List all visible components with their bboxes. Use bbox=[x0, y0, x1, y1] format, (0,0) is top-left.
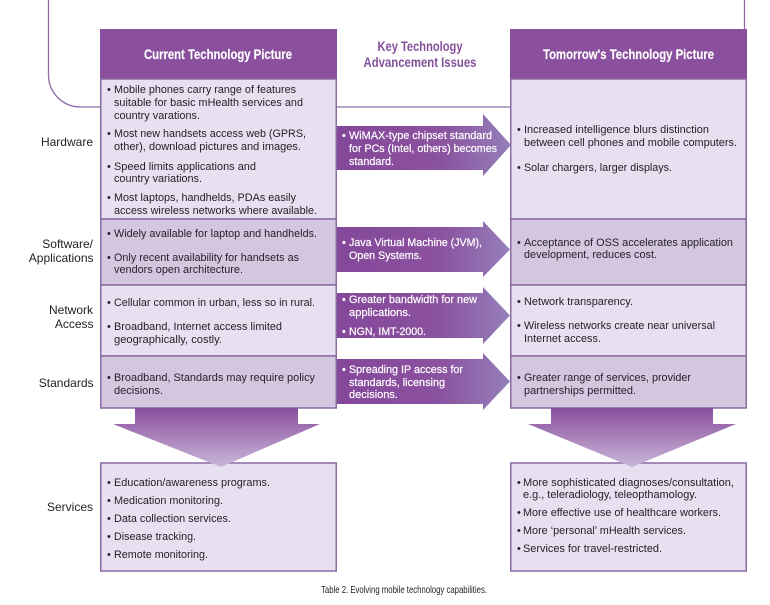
arrow: hardware advancement: for PCs (Intel, others) becomes bbox=[349, 143, 497, 155]
panel: tomorrow services: Services for travel-restricted. bbox=[523, 543, 662, 555]
panel: tomorrow services: • bbox=[517, 477, 521, 489]
row: current hardware: • bbox=[107, 84, 111, 96]
row: current software: Widely available for laptop and handhelds. bbox=[114, 228, 317, 240]
label: services: Services bbox=[47, 500, 93, 514]
arrow: software advancement bbox=[337, 221, 510, 277]
header: current technology: Current Technology Picture bbox=[144, 46, 292, 62]
row: tomorrow software: development, reduces cost. bbox=[524, 249, 657, 261]
label: software/applications: Software/ bbox=[42, 237, 94, 251]
panel: current services: Education/awareness programs. bbox=[114, 477, 270, 489]
panel: current technology picture bbox=[100, 29, 337, 408]
header: tomorrow's technology: Tomorrow's Technology Picture bbox=[543, 46, 714, 62]
row: current software: vendors open architecture. bbox=[114, 264, 243, 276]
row: tomorrow hardware: • bbox=[517, 124, 521, 136]
panel: current services: Data collection services. bbox=[114, 513, 231, 525]
row: current software: • bbox=[107, 252, 111, 264]
row: current software bbox=[101, 219, 336, 285]
arrow: network advancement bbox=[337, 287, 510, 344]
row: current hardware: country varations. bbox=[114, 110, 200, 122]
arrow: standards advancement: Spreading IP access for bbox=[349, 364, 463, 376]
row: current hardware: • bbox=[107, 128, 111, 140]
connector line: outer frame bbox=[48, 0, 744, 107]
panel: current services: Remote monitoring. bbox=[114, 549, 208, 561]
arrow: standards advancement: decisions. bbox=[349, 389, 398, 401]
label: network access: Access bbox=[55, 317, 94, 331]
panel: current services: • bbox=[107, 495, 111, 507]
label: software/applications: Applications bbox=[29, 251, 94, 265]
row: current hardware: Mobile phones carry range of features bbox=[114, 84, 296, 96]
row: current hardware: • bbox=[107, 161, 111, 173]
label: network access: Network bbox=[49, 303, 94, 317]
row: current hardware: Most laptops, handhelds, PDAs easily bbox=[114, 192, 296, 204]
arrow: network advancement: NGN, IMT-2000. bbox=[349, 326, 426, 338]
row: current standards bbox=[101, 356, 336, 408]
row: tomorrow standards: partnerships permitted. bbox=[524, 385, 636, 397]
arrow: hardware advancement: standard. bbox=[349, 156, 394, 168]
panel: current services: • bbox=[107, 513, 111, 525]
row: tomorrow network access: • bbox=[517, 296, 521, 308]
row: current network access: Cellular common in urban, less so in rural. bbox=[114, 297, 315, 309]
arrow: hardware advancement: WiMAX-type chipset standard bbox=[349, 130, 492, 142]
row: tomorrow network access bbox=[511, 285, 746, 356]
arrow: network advancement: Greater bandwidth for new bbox=[349, 294, 477, 306]
panel: tomorrow services bbox=[511, 463, 746, 571]
row: current network access: • bbox=[107, 321, 111, 333]
row: current hardware: suitable for basic mHealth services and bbox=[114, 97, 303, 109]
label: hardware: Hardware bbox=[41, 135, 93, 149]
row: current software: • bbox=[107, 228, 111, 240]
row: current network access: geographically, costly. bbox=[114, 334, 222, 346]
panel: tomorrow services: • bbox=[517, 507, 521, 519]
row: current hardware: • bbox=[107, 192, 111, 204]
row: tomorrow network access: Internet access. bbox=[524, 333, 601, 345]
row: tomorrow network access: Wireless networks create near universal bbox=[524, 320, 715, 332]
heading: key technology advancement issues: Key Technology bbox=[378, 38, 463, 54]
row: tomorrow hardware: between cell phones and mobile computers. bbox=[524, 137, 737, 149]
row: current network access: Broadband, Internet access limited bbox=[114, 321, 282, 333]
arrow: hardware advancement: • bbox=[342, 130, 346, 142]
row: tomorrow hardware bbox=[511, 79, 746, 219]
row: tomorrow software: • bbox=[517, 237, 521, 249]
row: current hardware: country variations. bbox=[114, 173, 202, 185]
row labels bbox=[29, 135, 94, 514]
row: tomorrow network access: Network transparency. bbox=[524, 296, 633, 308]
row: tomorrow hardware: Solar chargers, larger displays. bbox=[524, 162, 672, 174]
arrow: software advancement: Java Virtual Machine (JVM), bbox=[349, 237, 482, 249]
panel: current services: • bbox=[107, 477, 111, 489]
panel: tomorrow's technology picture bbox=[510, 29, 747, 408]
arrow: current down to services bbox=[113, 408, 320, 467]
row: current hardware bbox=[101, 79, 336, 219]
row: current standards: Broadband, Standards may require policy bbox=[114, 372, 315, 384]
row: tomorrow software: Acceptance of OSS accelerates application bbox=[524, 237, 733, 249]
heading: key technology advancement issues bbox=[364, 38, 477, 70]
arrow: software advancement: • bbox=[342, 237, 346, 249]
arrow: standards advancement bbox=[337, 353, 510, 410]
row: current hardware: Most new handsets access web (GPRS, bbox=[114, 128, 306, 140]
arrow: tomorrow down to services bbox=[528, 408, 736, 467]
label: standards: Standards bbox=[39, 376, 94, 390]
row: tomorrow software bbox=[511, 219, 746, 285]
panel: tomorrow services: More sophisticated diagnoses/consultation, bbox=[523, 477, 734, 489]
row: current network access bbox=[101, 285, 336, 356]
panel: tomorrow services: e.g., teleradiology, teleopthamology. bbox=[523, 489, 697, 501]
panel: current services bbox=[101, 463, 336, 571]
arrow: software advancement: Open Systems. bbox=[349, 250, 422, 262]
panel: tomorrow services: • bbox=[517, 543, 521, 555]
row: current hardware: other), download pictures and images. bbox=[114, 141, 301, 153]
arrow: network advancement: • bbox=[342, 326, 346, 338]
header: current technology bbox=[100, 29, 337, 79]
row: tomorrow hardware: • bbox=[517, 162, 521, 174]
heading: key technology advancement issues: Advancement Issues bbox=[364, 54, 477, 70]
row: current hardware: Speed limits applications and bbox=[114, 161, 256, 173]
panel: tomorrow services: • bbox=[517, 525, 521, 537]
header: tomorrow's technology bbox=[510, 29, 747, 79]
arrow: network advancement: applications. bbox=[349, 307, 411, 319]
row: current hardware: access wireless networks where available. bbox=[114, 205, 317, 217]
panel: current services: • bbox=[107, 549, 111, 561]
row: tomorrow standards: Greater range of services, provider bbox=[524, 372, 691, 384]
arrow: hardware advancement bbox=[337, 114, 511, 176]
row: tomorrow network access: • bbox=[517, 320, 521, 332]
arrow: standards advancement: • bbox=[342, 364, 346, 376]
arrow: standards advancement: standards, licensing bbox=[349, 377, 445, 389]
row: tomorrow standards: • bbox=[517, 372, 521, 384]
row: current network access: • bbox=[107, 297, 111, 309]
row: tomorrow hardware: Increased intelligence blurs distinction bbox=[524, 124, 709, 136]
row: current software: Only recent availability for handsets as bbox=[114, 252, 299, 264]
panel: current services: • bbox=[107, 531, 111, 543]
panel: tomorrow services: More ‘personal’ mHealth services. bbox=[523, 525, 686, 537]
row: tomorrow standards bbox=[511, 356, 746, 408]
panel: tomorrow services: More effective use of healthcare workers. bbox=[523, 507, 721, 519]
panel: current services: Medication monitoring. bbox=[114, 495, 223, 507]
panel: current services: Disease tracking. bbox=[114, 531, 196, 543]
arrow: network advancement: • bbox=[342, 294, 346, 306]
row: current standards: decisions. bbox=[114, 385, 163, 397]
caption: Table 2. Evolving mobile technology capabilities. bbox=[321, 584, 487, 596]
row: current standards: • bbox=[107, 372, 111, 384]
